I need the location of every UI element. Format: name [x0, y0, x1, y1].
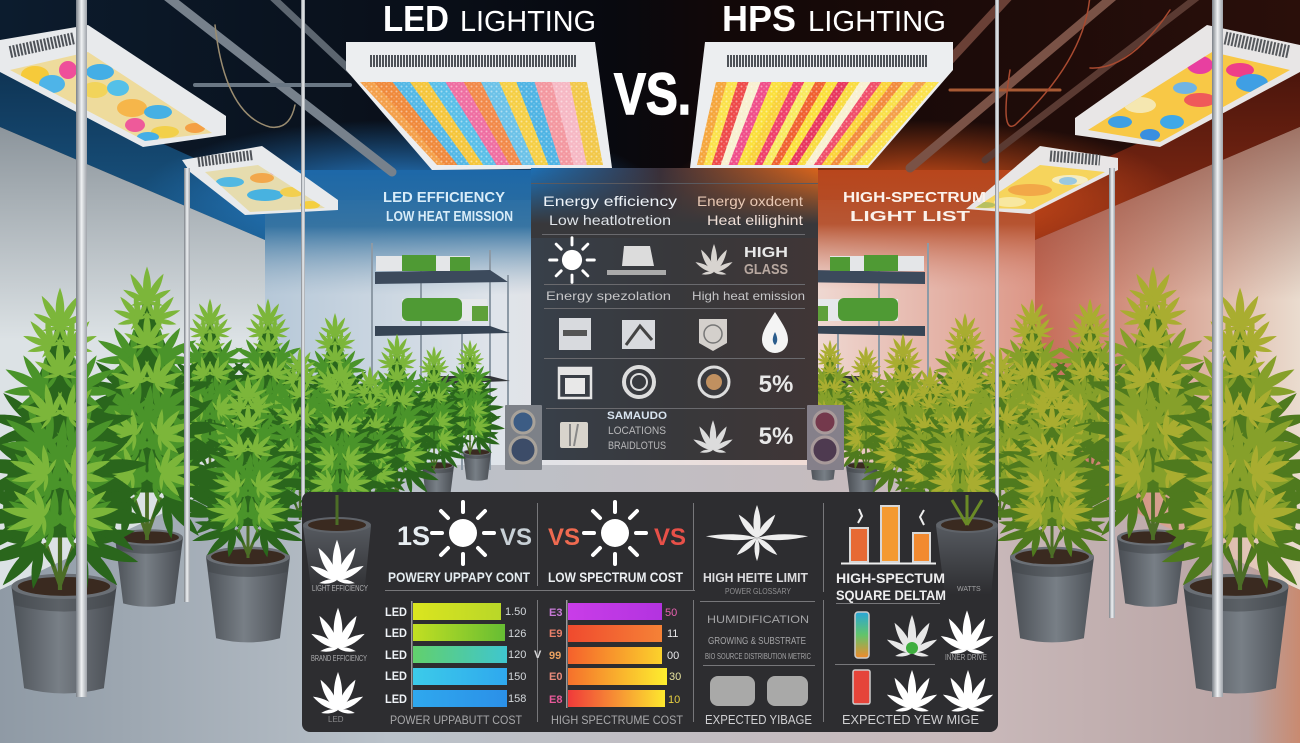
icon: leaf with green core — [885, 615, 939, 658]
stat: VS sun VS: VS — [548, 524, 580, 551]
label: high-spectrum light: LIGHT LIST — [850, 208, 970, 225]
icon row 3 — [559, 367, 729, 398]
icon: leaf — [939, 610, 995, 655]
label: LED efficiency — [383, 189, 513, 225]
plants: left foreground group — [0, 266, 318, 694]
light: second right fixture — [966, 146, 1118, 214]
plants: left background group — [151, 299, 508, 532]
stat: 1S sun VS — [397, 502, 532, 564]
label: LED efficiency: LED EFFICIENCY — [383, 189, 505, 206]
text: samsung locations — [607, 410, 667, 452]
bar chart: HPS: 50 — [665, 607, 677, 619]
icon row 2 — [559, 312, 788, 353]
icon: leaf — [885, 670, 939, 713]
icon row 4 — [560, 422, 588, 448]
bar chart: LED: LED — [385, 692, 407, 706]
title: VS.: VS. — [614, 62, 691, 127]
caption: WATTS — [957, 586, 981, 593]
icon: spectrum pill — [855, 612, 869, 658]
text row: energy separation and heat emission — [546, 289, 805, 303]
panel: bottom comparison dashboard — [302, 492, 998, 732]
ceiling conduits and wires — [165, 0, 1200, 172]
stat: 1S sun VS: 1S — [397, 521, 430, 551]
bar chart: HPS — [534, 600, 681, 708]
title: LED lighting: LIGHTING — [460, 6, 596, 38]
stat: 5% lower: 5% — [759, 423, 793, 450]
panel dividers — [385, 503, 940, 722]
bar chart: HPS: 99 — [549, 650, 561, 662]
icon: leaf top-left — [309, 540, 365, 585]
light: top-left fixture — [0, 25, 226, 147]
panel: central comparison — [531, 168, 818, 460]
caption: INNER DRIVE — [945, 653, 987, 662]
HPS central panel light — [690, 42, 953, 168]
bar chart: LED — [385, 601, 526, 709]
shelf: right — [790, 243, 928, 470]
caption: LED — [328, 715, 344, 724]
icon: leaf bottom-left — [311, 672, 365, 715]
bar chart: LED: LED — [385, 669, 407, 683]
text: high — [744, 244, 788, 278]
text block: humidification: BIO SOURCE DISTRIBUTION METRIC — [705, 652, 811, 661]
stat: VS sun VS: VS — [654, 524, 686, 551]
caption: power uppabutt cost: POWER UPPABUTT COST — [390, 713, 523, 727]
light: top-right fixture — [1075, 25, 1300, 147]
label: high-spectrum light: HIGH-SPECTRUM — [843, 189, 986, 206]
central panel headings — [543, 193, 803, 228]
shelf: left — [372, 243, 510, 470]
bar chart: HPS: 30 — [669, 671, 681, 683]
stat: 1S sun VS: VS — [500, 524, 532, 551]
caption: expected yibage: EXPECTED YIBAGE — [705, 712, 812, 727]
bar chart: HPS: V — [534, 649, 542, 661]
heading: high-spectum square deltam — [836, 570, 946, 603]
heading: powery uppapy cont: POWERY UPPAPY CONT — [388, 569, 530, 585]
bar chart: HPS: E3 — [549, 607, 562, 619]
text: samsung locations: SAMAUDO — [607, 410, 667, 422]
bar chart: HPS: E8 — [549, 694, 562, 706]
bar chart: HPS: 00 — [667, 650, 679, 662]
speaker: left — [505, 405, 542, 470]
caption: BRAND EFFICIENCY — [311, 654, 367, 663]
bar chart: HPS: E0 — [549, 671, 562, 683]
label: high-spectrum light — [843, 189, 986, 225]
label: LED efficiency: LOW HEAT EMISSION — [386, 208, 513, 225]
bar chart: HPS: 10 — [668, 694, 680, 706]
bar chart: LED: LED — [385, 605, 407, 619]
bar chart: HPS: E9 — [549, 628, 562, 640]
caption: LIGHT EFFICIENCY — [312, 584, 369, 593]
caption: high spectrume cost: HIGH SPECTRUME COST — [551, 713, 684, 727]
bar chart: LED: LED — [385, 648, 407, 662]
text: high: GLASS — [744, 261, 788, 278]
stat: 5%: 5% — [759, 371, 793, 398]
text: samsung locations: LOCATIONS — [608, 425, 666, 437]
plants: right background group — [792, 299, 1149, 532]
central panel headings: Low heatlotretion — [549, 212, 671, 228]
bar chart: LED: 150 — [508, 671, 526, 683]
icon: large leaf — [706, 505, 808, 561]
icon: panel device — [607, 246, 666, 275]
text: high: HIGH — [744, 244, 788, 261]
heading: high-spectum square deltam: SQUARE DELTAM — [836, 587, 946, 603]
text: samsung locations: BRAIDLOTUS — [608, 440, 666, 452]
bar chart: LED: 158 — [508, 693, 526, 705]
icon: harvest blobs — [710, 676, 808, 706]
bar chart: LED: LED — [385, 626, 407, 640]
caption: POWER GLOSSARY — [725, 587, 792, 596]
icon: maple leaf — [694, 244, 734, 276]
central panel headings: Energy oxdcent — [697, 193, 803, 209]
text block: humidification: HUMIDIFICATION — [707, 614, 809, 626]
heading: high-spectum square deltam: HIGH-SPECTUM — [836, 570, 945, 586]
central panel headings: Energy efficiency — [543, 193, 677, 209]
plants: right foreground group — [982, 266, 1300, 694]
LED central panel light — [346, 42, 612, 170]
central panel dividers — [542, 234, 805, 408]
heading: low spectrum cost: LOW SPECTRUM COST — [548, 569, 683, 585]
icon: red pill — [853, 670, 870, 704]
pot: left overlapping panel — [303, 495, 371, 595]
icon: sun — [550, 238, 594, 282]
text block: humidification: GROWING & SUBSTRATE — [708, 636, 806, 647]
heading: high heite limit: HIGH HEITE LIMIT — [703, 570, 808, 585]
icon: leaf mid-left — [310, 608, 366, 653]
bar chart: LED: 120 — [508, 649, 526, 661]
bar chart: LED: 1.50 — [505, 606, 526, 618]
light: second left fixture — [182, 146, 338, 216]
stat: VS sun VS — [548, 502, 686, 564]
central panel headings: Heat elilighint — [707, 212, 803, 228]
text block: humidification — [705, 614, 811, 661]
text row: energy separation and heat emission: High heat emission — [692, 289, 805, 303]
title: HPS lighting: LIGHTING — [808, 6, 946, 38]
bar chart icon — [841, 506, 936, 564]
icon: leaf cluster — [692, 420, 734, 454]
bar chart: LED: 126 — [508, 628, 526, 640]
speaker: right — [807, 405, 844, 470]
pot: right overlapping panel — [936, 495, 998, 595]
caption: expected yew mige: EXPECTED YEW MIGE — [842, 712, 979, 727]
bar chart: HPS: 11 — [667, 628, 678, 640]
text row: energy separation and heat emission: Energy spezolation — [546, 289, 671, 303]
icon: leaf — [941, 670, 995, 713]
